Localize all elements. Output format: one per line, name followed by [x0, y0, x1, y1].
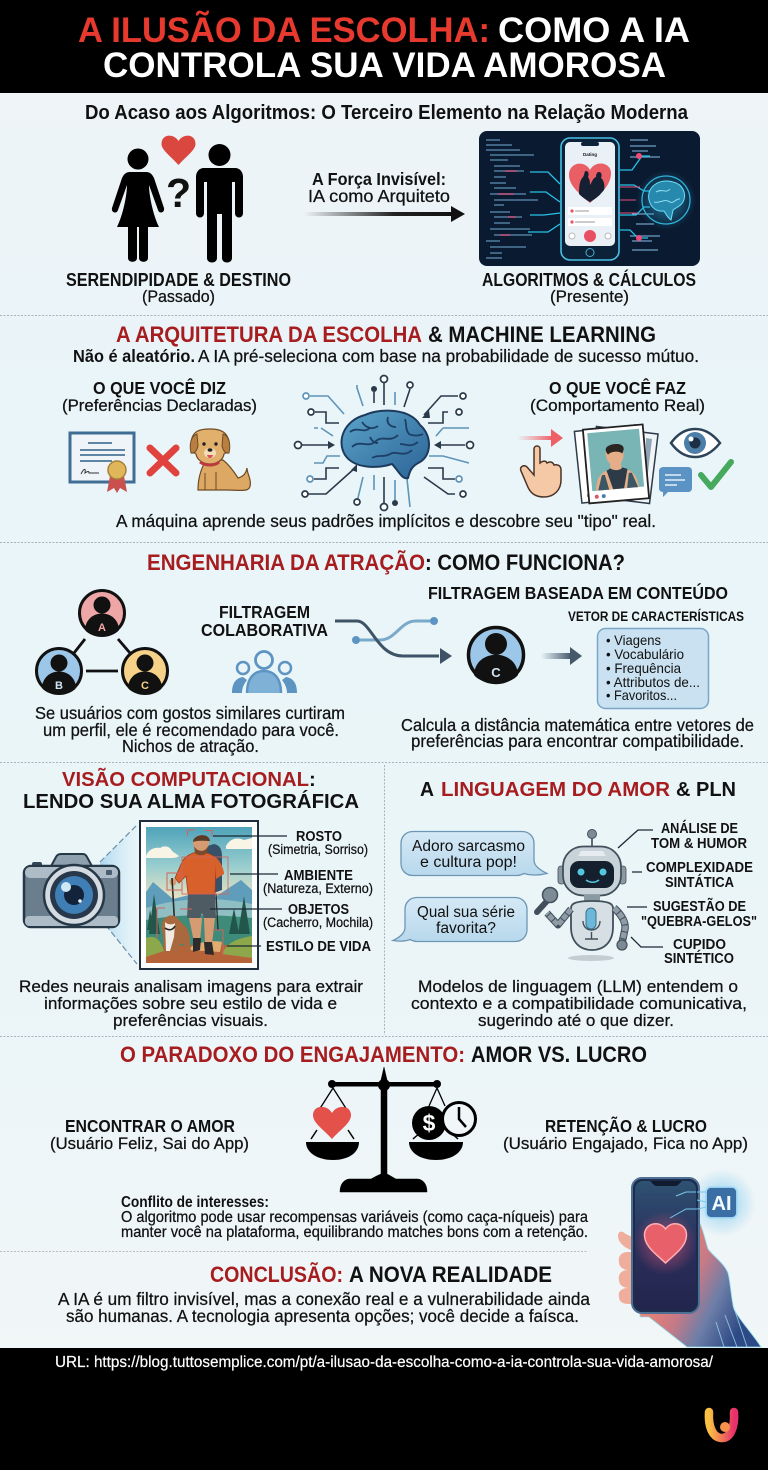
image: phone with code and brain	[479, 131, 700, 266]
text: computer vision explanation: preferências visuais.	[113, 1011, 268, 1030]
label: collaborative filtering: FILTRAGEM	[219, 602, 310, 622]
footer band	[0, 1348, 768, 1470]
icon: brain with circuit connections	[294, 376, 474, 510]
source URL: URL: https://blog.tuttosemplice.com/pt/a-ilusao-da-escolha-como-a-ia-controla-sua-vida-amorosa/	[55, 1354, 714, 1371]
heading: AMOR VS. LUCRO	[471, 1042, 647, 1067]
card: feature vector list: • Favoritos...	[606, 687, 677, 703]
icon: camera with view cone	[24, 825, 137, 964]
callouts: language analysis labels: COMPLEXIDADE	[646, 860, 753, 876]
callouts: photo analysis labels: (Natureza, Externo)	[263, 881, 373, 896]
card: feature vector list	[598, 628, 708, 708]
panel: the language of love and NLP	[393, 778, 757, 1030]
text: collaborative filtering explanation: Se usuários com gostos similares curtiram	[35, 703, 345, 723]
callouts: language analysis labels: SINTÉTICO	[664, 950, 734, 967]
callouts: language analysis labels: ANÁLISE DE	[661, 820, 738, 837]
speech bubble: AI question: favorita?	[436, 920, 496, 937]
callouts: language analysis labels	[618, 820, 757, 967]
callouts: photo analysis labels: ROSTO	[296, 829, 342, 845]
callouts: photo analysis labels: (Simetria, Sorriso)	[268, 842, 368, 857]
icon: green check	[701, 462, 731, 487]
image: phone with code and brain: Dating	[583, 152, 597, 157]
callouts: photo analysis labels: (Cacherro, Mochila)	[263, 915, 373, 930]
title line 1: A ILUSÃO DA ESCOLHA:	[78, 11, 490, 50]
icon: chat bubble	[659, 467, 692, 497]
icon: balance scale	[306, 1067, 476, 1192]
callouts: language analysis labels: CUPIDO	[673, 937, 726, 953]
icon: red cross	[150, 448, 176, 473]
heading: O PARADOXO DO ENGAJAMENTO:	[120, 1042, 465, 1067]
callouts: language analysis labels: TOM & HUMOR	[651, 836, 747, 852]
icon: couple with heart and question mark: ?	[166, 170, 191, 216]
heading	[23, 768, 359, 813]
diagram: user triangle	[36, 590, 168, 694]
card: feature vector list: • Vocabulário	[606, 646, 684, 662]
intro sentence: A IA pré-seleciona com base na probabilidade de sucesso mútuo.	[198, 346, 699, 366]
label: finding love	[50, 1116, 249, 1153]
speech bubble: user statement	[401, 832, 547, 876]
text: language model explanation: contexto e a compatibilidade comunicativa,	[411, 994, 747, 1013]
icon: eye	[671, 429, 720, 457]
icon: stack of photos	[574, 424, 658, 504]
heading: A	[420, 778, 434, 801]
label: what you do	[530, 377, 705, 415]
caption: past: SERENDIPIDADE & DESTINO	[66, 270, 291, 290]
heading: A ARQUITETURA DA ESCOLHA	[116, 322, 422, 347]
heading	[116, 322, 656, 347]
heading	[147, 550, 625, 575]
heading: conclusion	[210, 1262, 552, 1287]
text: content filtering explanation	[401, 715, 754, 751]
image: hand holding phone with AI chip	[618, 1169, 761, 1347]
label: what you say: (Preferências Declaradas)	[62, 396, 257, 415]
arrow label: invisible force: A Força Invisível:	[312, 169, 446, 189]
label: collaborative filtering: COLABORATIVA	[201, 620, 328, 640]
panel: from chance to algorithms	[66, 102, 700, 306]
speech bubble: user statement: e cultura pop!	[420, 854, 517, 871]
label: what you do: O QUE VOCÊ FAZ	[549, 377, 686, 398]
icon: dog	[190, 429, 250, 490]
label: what you do: (Comportamento Real)	[530, 396, 705, 415]
text: computer vision explanation	[19, 977, 363, 1030]
text: conclusion	[58, 1289, 590, 1326]
text: conclusion: são humanas. A tecnologia apresenta opções; você decide a faísca.	[66, 1306, 579, 1326]
label: retention and profit: RETENÇÃO & LUCRO	[545, 1115, 707, 1136]
icon: logo	[709, 1412, 734, 1438]
title banner	[0, 0, 768, 93]
heading: & PLN	[676, 778, 736, 801]
panel: choice architecture and machine learning	[62, 322, 731, 531]
callouts: language analysis labels: SINTÁTICA	[665, 874, 734, 891]
icon: group of people	[232, 652, 297, 693]
text: conflict of interest: manter você na plataforma, equilibrando matches bons com a retenção.	[121, 1224, 588, 1241]
speech bubble: AI question	[393, 898, 527, 942]
caption: present: ALGORITMOS & CÁLCULOS	[482, 269, 696, 290]
caption: past	[66, 270, 291, 306]
heading: conclusion: A NOVA REALIDADE	[349, 1262, 552, 1287]
icon: robot with microphone	[537, 830, 627, 961]
callouts: photo analysis labels: OBJETOS	[288, 902, 349, 918]
card: feature vector list: • Frequência	[606, 660, 681, 676]
caption: present	[482, 269, 696, 306]
title line 2: CONTROLA SUA VIDA AMOROSA	[103, 46, 666, 85]
arrow: user to feature vector	[541, 647, 582, 665]
text: collaborative filtering explanation: Nichos de atração.	[122, 736, 259, 756]
icon: user C: C	[491, 665, 501, 680]
label: retention and profit: (Usuário Engajado, Fica no App)	[503, 1134, 748, 1153]
heading: ENGENHARIA DA ATRAÇÃO	[147, 550, 425, 575]
text: content filtering explanation: preferências para encontrar compatibilidade.	[411, 731, 744, 751]
callouts: photo analysis labels	[210, 829, 373, 955]
icon: couple with heart and question mark	[112, 136, 243, 262]
diagram: user triangle: C	[141, 680, 149, 692]
caption: past: (Passado)	[142, 287, 215, 306]
icon: user C	[468, 628, 524, 683]
card: feature vector list: • Viagens	[606, 632, 661, 648]
callouts: language analysis labels: SUGESTÃO DE	[653, 897, 746, 915]
text: conclusion: A IA é um filtro invisível, mas a conexão real e a vulnerabilidade ainda	[58, 1289, 590, 1309]
text: language model explanation: sugerindo até o que dizer.	[478, 1011, 674, 1030]
callouts: photo analysis labels: AMBIENTE	[284, 868, 353, 884]
text: language model explanation: Modelos de linguagem (LLM) entendem o	[418, 977, 738, 996]
label: finding love: ENCONTRAR O AMOR	[65, 1116, 235, 1136]
image: hand holding phone with AI chip: AI	[712, 1193, 732, 1215]
diagram: user triangle: B	[55, 680, 63, 692]
arrow: past to present	[304, 206, 465, 222]
text: computer vision explanation: Redes neurais analisam imagens para extrair	[19, 977, 363, 996]
heading: content based filtering: FILTRAGEM BASEADA EM CONTEÚDO	[428, 582, 728, 603]
text: language model explanation	[411, 977, 747, 1030]
label: collaborative filtering	[201, 602, 328, 640]
arrow label: invisible force	[308, 169, 450, 206]
section subtitle: Do Acaso aos Algoritmos: O Terceiro Elemento na Relação Moderna	[85, 102, 689, 124]
speech bubble: user statement: Adoro sarcasmo	[412, 838, 525, 855]
label: what you say: O QUE VOCÊ DIZ	[93, 377, 226, 398]
heading: :	[309, 768, 316, 791]
text: conflict of interest: Conflito de interesses:	[121, 1194, 269, 1211]
label: feature vector: VETOR DE CARACTERÍSTICAS	[568, 609, 744, 624]
card: feature vector list: • Attributos de...	[606, 674, 700, 690]
label: retention and profit	[503, 1115, 748, 1153]
icon: certificate	[70, 433, 134, 493]
text: conflict of interest	[121, 1194, 588, 1241]
text: collaborative filtering explanation	[35, 703, 345, 756]
heading: & MACHINE LEARNING	[428, 322, 656, 347]
heading: : COMO FUNCIONA?	[425, 550, 625, 575]
heading: LENDO SUA ALMA FOTOGRÁFICA	[23, 790, 359, 813]
callouts: photo analysis labels: ESTILO DE VIDA	[266, 939, 371, 955]
icon: balance scale: $	[423, 1110, 436, 1136]
caption: present: (Presente)	[550, 287, 629, 306]
panel: engagement paradox	[50, 1042, 761, 1347]
text: content filtering explanation: Calcula a distância matemática entre vetores de	[401, 715, 754, 735]
title line 1	[78, 11, 690, 50]
label: finding love: (Usuário Feliz, Sai do App)	[50, 1134, 249, 1153]
label: what you say	[62, 377, 257, 415]
diagram: crossing flow arrows	[335, 617, 452, 664]
arrow label: invisible force: IA como Arquiteto	[308, 186, 450, 206]
diagram: user triangle: A	[98, 622, 106, 634]
intro sentence: Não é aleatório.	[73, 346, 195, 366]
icon: swiping hand	[517, 429, 563, 497]
text: conflict of interest: O algoritmo pode usar recompensas variáveis (como caça-níqueis) para	[121, 1209, 588, 1226]
speech bubble: AI question: Qual sua série	[417, 904, 515, 921]
heading: LINGUAGEM DO AMOR	[441, 778, 670, 801]
closing sentence: A máquina aprende seus padrões implícitos e descobre seu "tipo" real.	[116, 511, 656, 531]
title line 1: COMO A IA	[498, 11, 690, 50]
heading: conclusion: CONCLUSÃO:	[210, 1262, 343, 1287]
text: computer vision explanation: informações sobre seu estilo de vida e	[44, 994, 337, 1013]
image: analysed hiker photo	[140, 821, 258, 969]
panel: attraction engineering	[35, 550, 754, 756]
heading: VISÃO COMPUTACIONAL	[62, 768, 309, 791]
panel: computer vision	[19, 768, 373, 1030]
text: collaborative filtering explanation: um perfil, ele é recomendado para você.	[43, 720, 339, 740]
